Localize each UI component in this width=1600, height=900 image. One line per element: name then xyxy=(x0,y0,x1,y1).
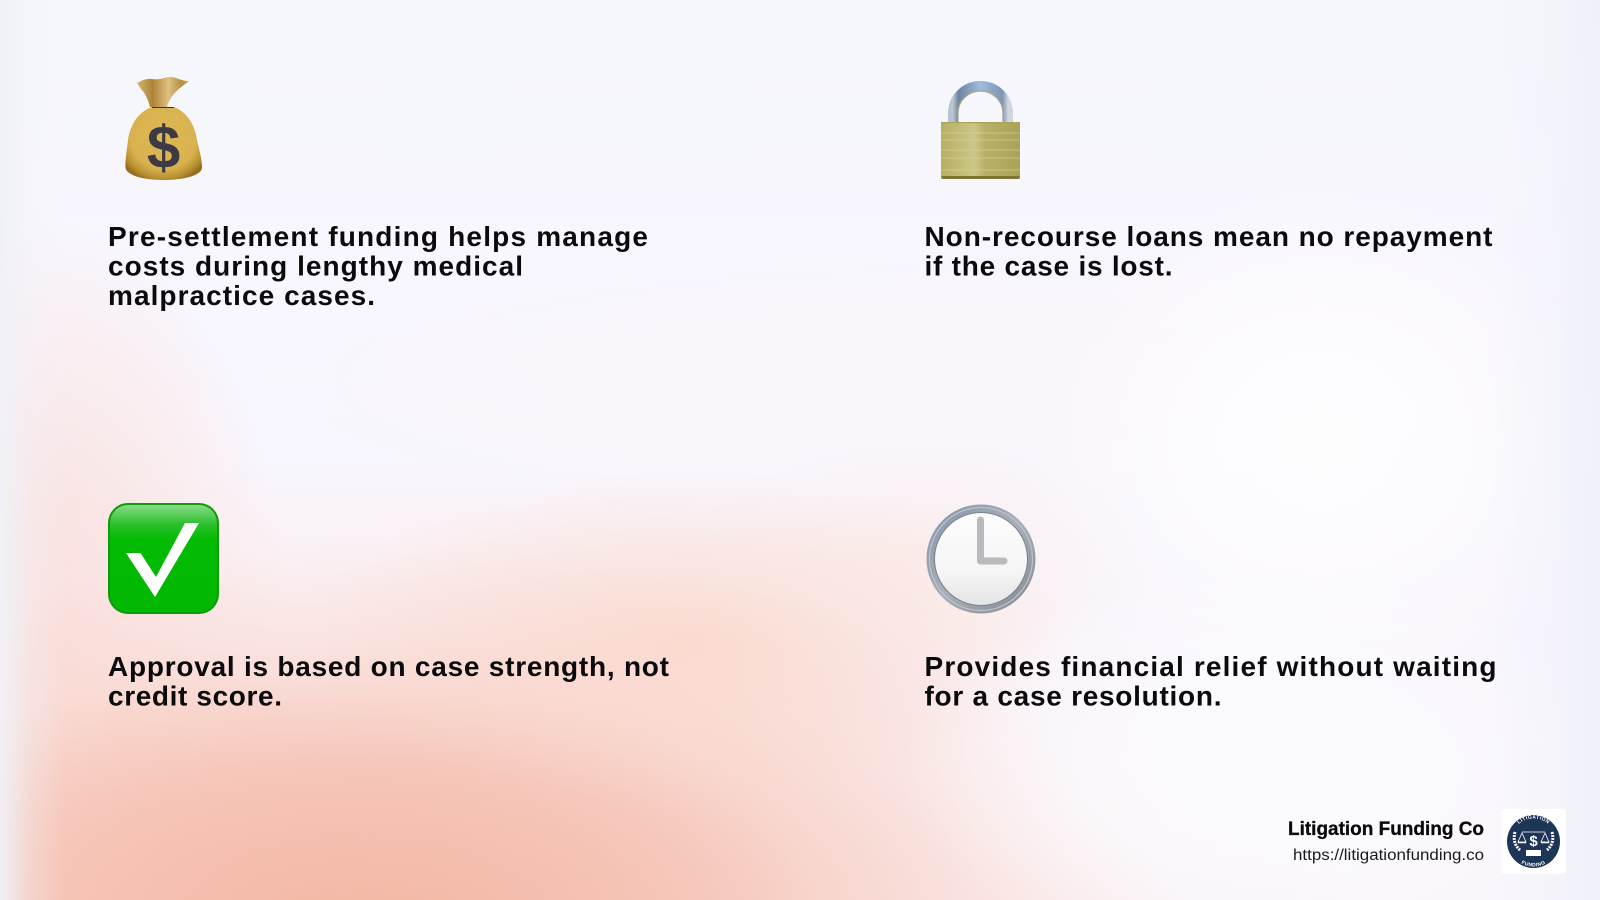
paragraph: non-recourse: if the case is lost. xyxy=(924,250,1172,282)
paragraph: financial relief: Provides financial relief without waiting xyxy=(924,651,1496,682)
icon: money bag xyxy=(125,77,202,181)
paragraph: pre-settlement: costs during lengthy medical xyxy=(108,250,523,282)
logo: $ xyxy=(1529,833,1538,850)
paragraph: financial relief: for a case resolution. xyxy=(924,680,1222,712)
icon: clock xyxy=(926,504,1036,614)
icon: money bag: $ xyxy=(147,114,180,181)
paragraph: pre-settlement: Pre-settlement funding helps manage xyxy=(108,221,648,252)
footer brand xyxy=(1288,818,1484,864)
logo: FUNDING xyxy=(1522,860,1545,866)
paragraph: financial relief xyxy=(924,651,1496,712)
logo xyxy=(1501,809,1566,874)
paragraph: pre-settlement: malpractice cases. xyxy=(108,280,375,311)
brand url: https://litigationfunding.co xyxy=(1293,847,1484,864)
icon: padlock xyxy=(941,86,1020,179)
paragraph: approval: credit score. xyxy=(108,680,282,712)
icon: check mark xyxy=(108,503,219,614)
paragraph: non-recourse: Non-recourse loans mean no repayment xyxy=(924,221,1492,252)
logo: LITIGATION xyxy=(1517,815,1550,824)
paragraph: non-recourse xyxy=(924,221,1492,282)
paragraph: approval xyxy=(108,651,669,712)
paragraph: pre-settlement xyxy=(108,221,648,311)
brand name: Litigation Funding Co xyxy=(1288,818,1484,840)
paragraph: approval: Approval is based on case strength, not xyxy=(108,651,669,682)
